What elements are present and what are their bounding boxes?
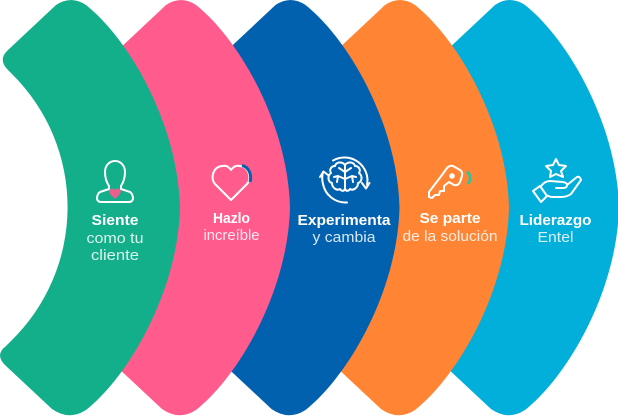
text: y cambia: y cambia <box>312 229 376 246</box>
icon: key <box>429 166 470 198</box>
text: increíble: increíble <box>204 227 260 244</box>
panel: Hazlo increíble <box>110 0 290 415</box>
text: cliente: cliente <box>91 247 139 264</box>
panel: Liderazgo Entel <box>439 0 618 415</box>
icon: person with heart <box>97 161 133 202</box>
text: Entel: Entel <box>538 229 574 246</box>
heading: Hazlo: Hazlo <box>213 210 250 227</box>
text: de la solución: de la solución <box>402 228 498 245</box>
panel: Experimenta y cambia <box>220 0 400 415</box>
heading: Siente: Siente <box>92 212 138 229</box>
icon: heart <box>213 166 251 200</box>
heading: Liderazgo: Liderazgo <box>520 212 592 229</box>
icon: star over hand <box>533 159 581 202</box>
text: como tu: como tu <box>86 230 144 247</box>
panel: Siente como tu cliente <box>0 0 180 415</box>
icon: brain with cycle arrows <box>320 157 370 203</box>
heading: Se parte: Se parte <box>420 210 480 227</box>
panel: Se parte de la solución <box>329 0 509 415</box>
heading: Experimenta: Experimenta <box>298 212 391 229</box>
